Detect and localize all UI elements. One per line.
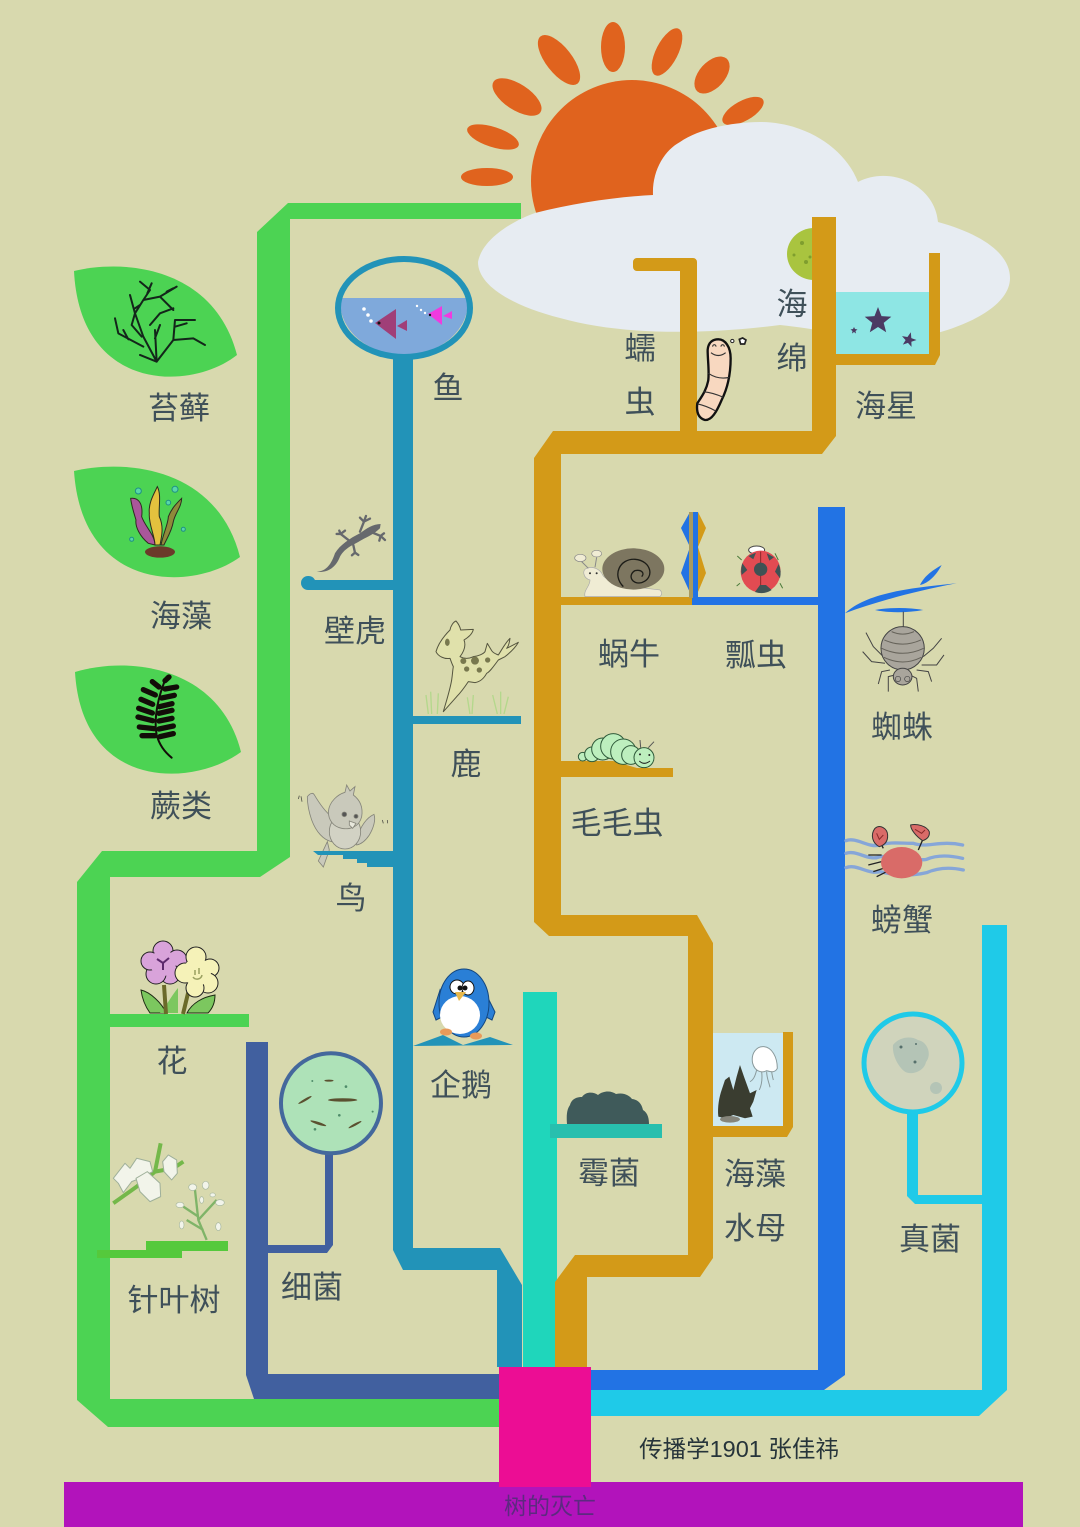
icon: sun — [461, 22, 768, 282]
bright blue arthropod pipe — [590, 507, 845, 1390]
icon: flowers — [141, 941, 219, 1014]
pink flower — [141, 941, 187, 984]
dark blue bacteria pipe — [246, 1042, 499, 1399]
labels: 真菌 — [899, 1222, 961, 1257]
labels: 细菌 — [281, 1270, 343, 1305]
starfish tank water — [836, 292, 930, 355]
icon: seaweed — [130, 486, 185, 558]
labels: 海星 — [855, 389, 917, 424]
flower shelf — [110, 1014, 249, 1027]
yellow flower — [175, 947, 219, 997]
labels: 花 — [156, 1044, 188, 1079]
icon: starfish — [850, 307, 918, 348]
title: 树的灭亡 — [504, 1493, 596, 1519]
labels: 蜘蛛 — [871, 710, 933, 745]
bird branch — [313, 851, 393, 867]
deer branch — [413, 716, 521, 724]
icon: ladybug — [737, 546, 783, 593]
labels: 鸟 — [336, 881, 366, 916]
icon: fishbowl — [338, 259, 470, 357]
icon: deer — [426, 621, 518, 714]
ground bar — [64, 1482, 1023, 1527]
starfish tub — [836, 253, 940, 365]
blue animal pipe — [301, 355, 522, 1367]
icon: conifer blossoms — [113, 1143, 224, 1240]
icon: snail — [575, 548, 664, 597]
green plant pipe — [77, 203, 521, 1427]
labels: 针叶树 — [128, 1283, 220, 1318]
snail shelf — [561, 597, 692, 605]
leaf: fern — [75, 666, 241, 774]
jellyfish tub — [713, 1032, 793, 1137]
labels: 企鹅 — [430, 1068, 492, 1103]
gecko branch — [301, 576, 393, 590]
jellyfish tank water — [713, 1033, 783, 1127]
labels: 海藻 — [150, 599, 212, 634]
labels: 虫 — [624, 385, 656, 420]
labels: 蠕 — [624, 331, 656, 366]
icon: fern — [138, 677, 177, 758]
trunk — [499, 1367, 591, 1487]
icon: gecko — [317, 516, 385, 572]
labels: 毛毛虫 — [570, 806, 664, 841]
labels: 苔藓 — [148, 391, 210, 426]
labels: 海藻 — [724, 1157, 786, 1192]
labels: 霉菌 — [578, 1156, 640, 1191]
icon: crab — [846, 825, 963, 878]
icon: bird — [298, 785, 388, 867]
leaf: seaweed — [74, 467, 240, 577]
icon: mold — [567, 1092, 649, 1124]
ladybug shelf — [692, 597, 818, 605]
caterpillar shelf — [561, 761, 673, 777]
labels: 螃蟹 — [871, 903, 933, 938]
teal fungus pipe — [523, 992, 662, 1367]
icon: cloud — [478, 122, 1010, 338]
icon: worm — [697, 338, 746, 420]
conifer shelf — [97, 1241, 228, 1258]
icon: bacteria dish — [281, 1053, 381, 1153]
labels: 海 — [776, 287, 808, 322]
icon: sponge — [787, 228, 814, 280]
labels: 鱼 — [432, 371, 464, 406]
big fish — [375, 309, 407, 339]
labels — [128, 287, 961, 1318]
labels: 瓢虫 — [725, 638, 787, 673]
labels: 水母 — [724, 1211, 786, 1246]
labels: 壁虎 — [324, 614, 386, 649]
labels: 鹿 — [450, 747, 482, 782]
leaf: moss — [74, 267, 237, 377]
labels: 绵 — [776, 341, 808, 376]
icon: moss — [115, 282, 205, 362]
icon: penguin — [413, 969, 513, 1046]
diamond connector — [681, 512, 706, 598]
mold shelf — [550, 1124, 662, 1138]
author credit: 传播学1901 张佳祎 — [639, 1436, 839, 1462]
icon: coral and jellyfish — [718, 1047, 777, 1123]
icon: spider on leaf — [845, 565, 957, 692]
worm branch — [633, 258, 697, 431]
bubbles — [362, 305, 426, 323]
cyan fungi pipe — [591, 925, 1007, 1416]
labels: 蜗牛 — [598, 637, 660, 672]
small fish — [428, 306, 452, 325]
icon: fungi dish — [864, 1014, 962, 1112]
labels: 蕨类 — [150, 789, 212, 824]
gold invertebrate pipe — [534, 217, 940, 1367]
icon: caterpillar — [578, 734, 654, 768]
